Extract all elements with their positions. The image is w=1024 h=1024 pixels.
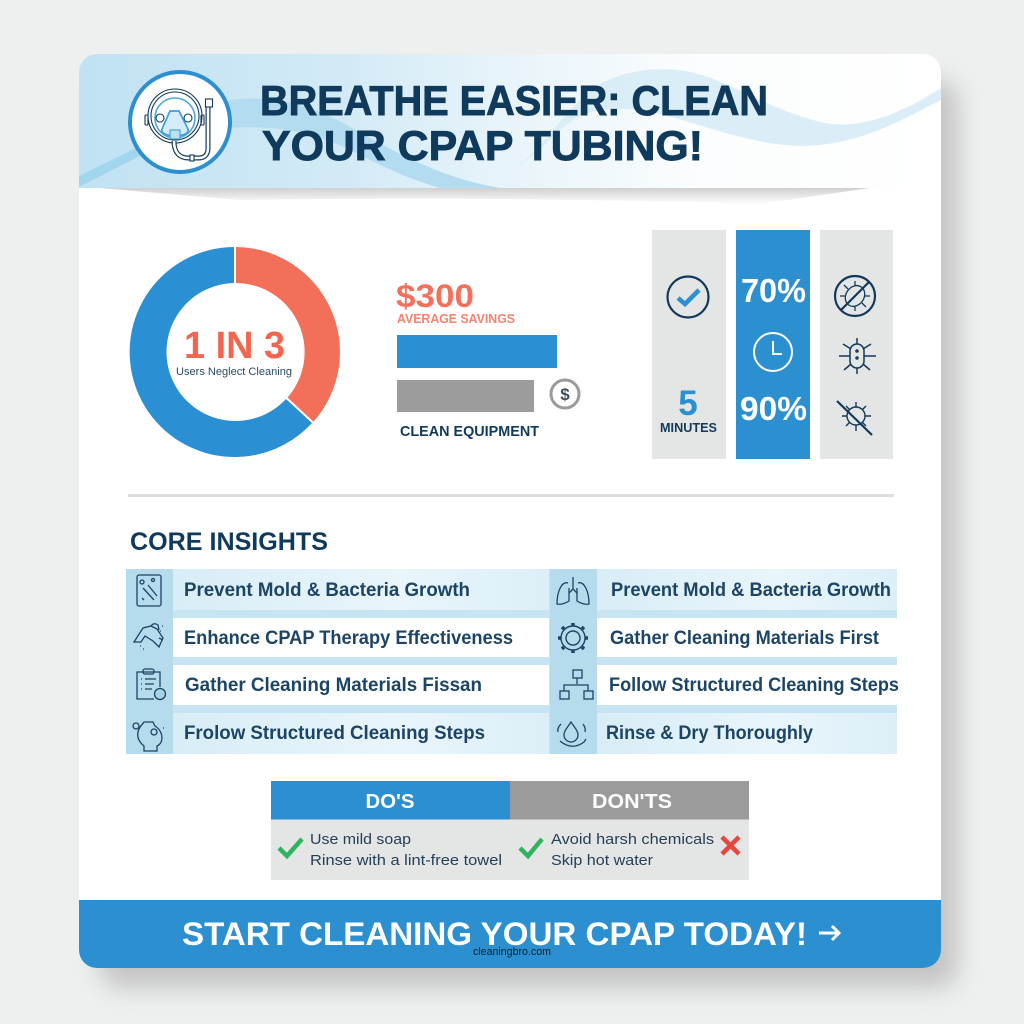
insight row 4 left: Frolow Structured Cleaning Steps: [184, 723, 485, 744]
icon: clock: [754, 333, 792, 371]
savings value: $300: [396, 278, 474, 314]
title: [260, 77, 768, 169]
bar label: CLEAN EQUIPMENT: [400, 423, 539, 440]
blue bar: [397, 335, 557, 368]
stat column: left: [652, 230, 726, 459]
donut value: 1 IN 3: [184, 325, 285, 367]
stat: 70%: 70%: [741, 272, 806, 309]
do's header: DO'S: [366, 791, 414, 813]
insight row 1 left: Prevent Mold & Bacteria Growth: [184, 580, 470, 601]
header shadow: [100, 188, 870, 204]
donut caption: Users Neglect Cleaning: [176, 366, 292, 378]
insight row 4 left: [173, 713, 549, 754]
insight row 3 left: [173, 665, 549, 705]
stat column: right: [820, 230, 893, 459]
do's list: Rinse with a lint-free towel: [310, 852, 502, 869]
icon: germ: [839, 338, 876, 374]
savings label: AVERAGE SAVINGS: [397, 311, 515, 326]
do's list: Use mild soap: [310, 831, 411, 848]
insight row 3 right: Follow Structured Cleaning Steps: [609, 675, 899, 696]
icon: dollar coin: $: [560, 385, 570, 404]
don'ts header: DON'TS: [592, 791, 672, 813]
title: YOUR CPAP TUBING!: [262, 122, 703, 169]
insight row 2 right: [597, 618, 897, 657]
icon: dollar coin: [551, 380, 579, 408]
insight row 1 right: Prevent Mold & Bacteria Growth: [611, 580, 891, 601]
stat: 5 minutes: 5: [678, 384, 698, 423]
arrow: [819, 926, 839, 940]
call to action footer: [79, 900, 941, 968]
icon: cleaning brush: [134, 624, 163, 649]
icon: check circle: [668, 276, 708, 318]
icon: lungs: [557, 577, 589, 604]
stat: 90%: 90%: [740, 390, 807, 427]
insight row 2 left: [173, 618, 549, 657]
donut chart: 1 in 3: [130, 247, 340, 457]
icon: tubing panel: [137, 575, 161, 606]
header banner: [79, 54, 941, 188]
don'ts list: Avoid harsh chemicals: [551, 831, 714, 848]
divider: [128, 494, 894, 497]
core insights heading: CORE INSIGHTS: [130, 528, 328, 556]
icon: no bacteria: [835, 276, 875, 316]
watermark: cleaningbro.com: [473, 946, 551, 958]
stat column: center: [736, 230, 810, 459]
card shadow: [100, 80, 958, 988]
insight row 4 right: [597, 713, 897, 754]
don'ts list: Skip hot water: [551, 852, 653, 869]
icon: clipboard checklist: [137, 669, 166, 700]
insight row 3 left: Gather Cleaning Materials Fissan: [185, 675, 482, 696]
call to action footer: START CLEANING YOUR CPAP TODAY!: [182, 916, 807, 952]
insight row 4 right: Rinse & Dry Thoroughly: [606, 723, 813, 744]
icon: water drop: [558, 722, 586, 746]
do's list: [279, 831, 502, 869]
insight row 2 right: Gather Cleaning Materials First: [610, 628, 880, 649]
icon: bottle: [133, 722, 164, 751]
stat: 5 minutes: MINUTES: [660, 420, 717, 435]
savings comparison: [396, 278, 579, 440]
core insights panel: [126, 569, 899, 754]
gray bar: [397, 380, 534, 412]
card: [79, 54, 941, 968]
don'ts list: [520, 831, 739, 869]
insight row 3 right: [597, 665, 899, 705]
do's and don'ts table: [271, 781, 749, 880]
icon: red cross: [722, 837, 739, 854]
icon: CPAP mask in circle: [130, 72, 230, 172]
icon: crossed germ: [837, 401, 872, 435]
icon: gear: [558, 623, 588, 653]
don'ts header: [510, 781, 749, 820]
insight row 1 left: [173, 569, 549, 610]
table body: [271, 820, 749, 880]
do's header: [271, 781, 510, 820]
icon: flow chart: [560, 670, 593, 699]
stat: 5 minutes: [660, 384, 717, 435]
title: BREATHE EASIER: CLEAN: [260, 77, 768, 124]
insight row 2 left: Enhance CPAP Therapy Effectiveness: [184, 628, 513, 649]
insight row 1 right: [597, 569, 897, 610]
